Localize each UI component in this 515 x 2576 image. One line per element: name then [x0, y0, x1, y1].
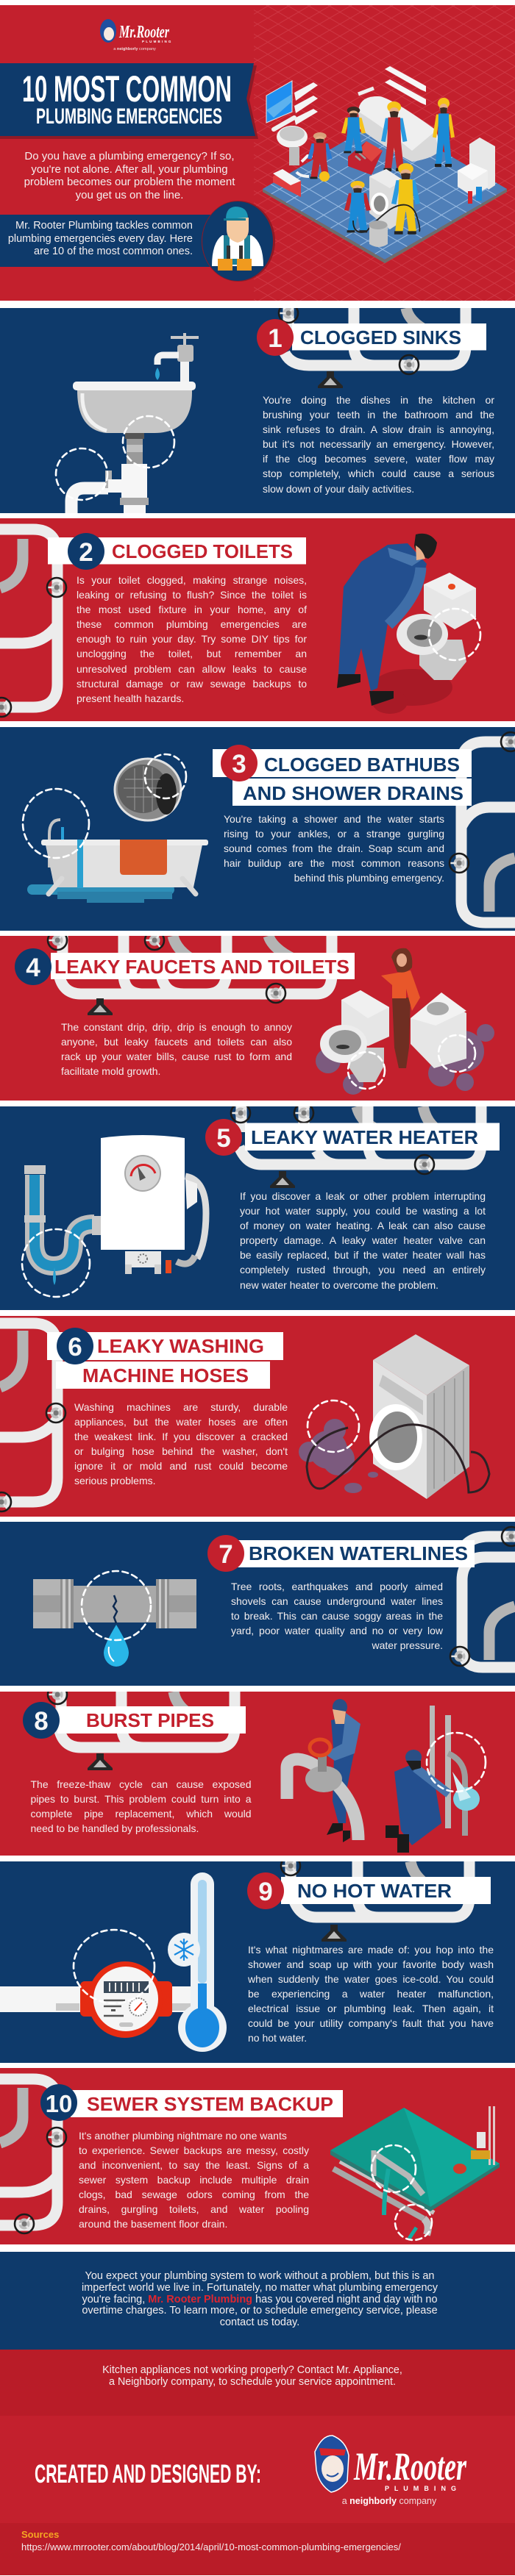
heading: leaky water heater: LEAKY WATER HEATER: [251, 1128, 478, 1148]
body text: You're taking a shower and the water starts: [224, 813, 444, 825]
body text: could be your utility company's fault that you have: [248, 2017, 494, 2029]
note text: [102, 2364, 402, 2388]
body text: if the clog becomes severe, water flow may: [263, 453, 494, 465]
callout text: [8, 220, 193, 257]
body text: but it's not necessarily an emergency. However,: [263, 438, 494, 450]
pipes: [0, 1323, 65, 1511]
body text: drains, gurgling toilets, and water pooling: [79, 2203, 309, 2215]
pipes: [231, 1103, 481, 1188]
body text: It's another plumbing nightmare no one wants: [79, 2130, 287, 2142]
illustration: sewer pipe under slab: [330, 2106, 500, 2240]
body text: Tree roots, earthquakes and poorly aimed: [231, 1581, 443, 1592]
section 1 artwork: [54, 308, 486, 513]
section 3 artwork: [22, 731, 515, 928]
body text: brushing your teeth in the bathroom and the: [263, 409, 494, 421]
logo: Mr. Rooter: PLUMBING: [142, 40, 173, 43]
body text: around the basement floor drain.: [79, 2218, 227, 2230]
body text: [248, 1944, 494, 2044]
closing text: contact us today.: [220, 2316, 299, 2328]
body text: appliances, but the water hoses are often: [74, 1416, 288, 1428]
body text: serious problems.: [74, 1475, 156, 1486]
title ribbon: 10 MOST COMMON: [22, 68, 232, 110]
closing text: You expect your plumbing system to work without a problem, but this is an: [85, 2270, 434, 2282]
illustration: workers repairing burst pipes: [287, 1699, 486, 1853]
illustration: bathroom repair scene: [263, 66, 507, 263]
body text: The freeze-thaw cycle can cause exposed: [31, 1778, 252, 1790]
body text: the most used fixture in your home, any of: [77, 604, 307, 615]
body text: be experiencing a water heater malfunction,: [248, 1988, 494, 2000]
heading: leaky faucets and toilets: [15, 948, 355, 985]
heading: no hot water: 9: [258, 1878, 273, 1906]
heading: sewer system backup: 10: [46, 2090, 72, 2117]
heading: burst pipes: BURST PIPES: [86, 1711, 214, 1731]
body text: If you discover a leak or other problem interrupting: [240, 1190, 486, 1202]
panel: appliance note: [0, 2350, 515, 2416]
heading: leaky faucets and toilets: 4: [26, 954, 40, 982]
body text: It's what nightmares are made of: you hop into the: [248, 1944, 494, 1956]
heading: leaky water heater: [205, 1119, 500, 1156]
body text: [224, 813, 444, 884]
body text: facilitate mold growth.: [61, 1065, 160, 1077]
body text: [263, 394, 494, 495]
note text: a Neighborly company, to schedule your service appointment.: [109, 2376, 396, 2388]
body text: [74, 1401, 288, 1486]
body text: sound comes from the drain. Soap scum and: [224, 842, 444, 854]
section 9 artwork: [0, 1861, 491, 2052]
title ribbon: [0, 63, 258, 139]
note text: Kitchen appliances not working properly? Contact Mr. Appliance,: [102, 2364, 402, 2376]
heading: burst pipes: [23, 1702, 246, 1739]
body text: Is your toilet clogged, making strange noises,: [77, 574, 307, 586]
heading: broken waterlines: 7: [219, 1540, 233, 1569]
callout text: are 10 of the most common ones.: [34, 246, 193, 257]
closing text: [82, 2270, 438, 2328]
body text: rising to your ankles, or a strange gurgling: [224, 828, 444, 840]
logo: Mr. Rooter large: [315, 2436, 467, 2506]
heading: leaky washing machine hoses: LEAKY WASHING: [97, 1337, 264, 1357]
body text: and inconvenient, to say the least. Signs of a: [79, 2159, 309, 2171]
heading: clogged toilets: 2: [79, 538, 93, 567]
source link: https://www.mrrooter.com/about/blog/2014/april/10-most-common-plumbing-emergencies/: [21, 2541, 401, 2552]
illustration: water heater and leaking trap: [22, 1135, 206, 1297]
body text: when suddenly the water goes ice-cold. You could: [248, 1973, 494, 1985]
body text: be easily replaced, but if the water heater wall has: [240, 1249, 486, 1261]
heading: leaky washing machine hoses: 6: [68, 1333, 82, 1362]
body text: or bulging hose behind the washer, don't: [74, 1445, 288, 1457]
body text: slow down of your daily activities.: [263, 483, 414, 495]
body text: property damage. A leaky water heater valve can: [240, 1234, 486, 1246]
body text: structural damage or raw sewage backups to: [77, 678, 307, 690]
logo: Mr. Rooter: [100, 19, 173, 51]
logo: Mr. Rooter: a neighborly company: [113, 47, 156, 51]
body text: complete pipe replacement, which would: [31, 1808, 252, 1820]
heading: no hot water: [247, 1872, 491, 1909]
body text: present health hazards.: [77, 693, 184, 704]
heading: no hot water: NO HOT WATER: [297, 1881, 452, 1902]
credits artwork: [35, 2435, 467, 2506]
body text: stop completely, which could cause a serious: [263, 468, 494, 479]
heading: sewer system backup: [40, 2084, 343, 2121]
illustration: woman with leaking fixtures: [316, 948, 494, 1095]
body text: sewer system backup include multiple drain: [79, 2174, 309, 2186]
panel: 6 leaky washing machine hoses: [0, 1316, 515, 1517]
pipes: [0, 2079, 66, 2233]
heading: broken waterlines: [207, 1535, 475, 1572]
title ribbon: PLUMBING EMERGENCIES: [36, 104, 222, 129]
heading: clogged toilets: [48, 533, 306, 570]
illustration: leaking sink: [56, 333, 199, 513]
body text: water pressure.: [372, 1639, 443, 1651]
icon: plumber with wrenches: [212, 207, 263, 271]
heading: clogged toilets: CLOGGED TOILETS: [112, 542, 293, 562]
intro artwork: [0, 5, 515, 301]
heading: clogged sinks: 1: [268, 324, 283, 353]
body text: need to be handled by professionals.: [31, 1822, 199, 1834]
body text: ignore it or mold and rust could become: [74, 1460, 288, 1472]
intro text: problem becomes our problem the moment: [24, 176, 235, 188]
intro text: Do you have a plumbing emergency? If so,: [24, 150, 235, 162]
heading: leaky faucets and toilets: LEAKY FAUCETS AND TOILETS: [54, 957, 349, 978]
body text: [61, 1021, 292, 1077]
pipes: [450, 732, 515, 923]
body text: yard, poor water quality and no or very low: [231, 1625, 443, 1636]
pipes: [450, 1527, 515, 1667]
panel: credits: [0, 2416, 515, 2523]
body text: to break. This can cause soggy areas in the: [231, 1610, 443, 1622]
body text: [31, 1778, 252, 1834]
logo: Mr. Rooter large: P L U M B I N G: [385, 2485, 456, 2492]
body text: You're doing the dishes in the kitchen or: [263, 394, 494, 406]
pipes: [48, 1685, 235, 1770]
logo: Mr. Rooter large: a neighborly company: [342, 2496, 437, 2506]
body text: behind this plumbing emergency.: [294, 872, 444, 884]
section 5 artwork: [21, 1106, 500, 1298]
section 8 artwork: [23, 1692, 487, 1853]
panel: 7 broken waterlines: [0, 1522, 515, 1686]
intro text: you're not alone. After all, your plumbing: [31, 163, 228, 176]
heading: leaky washing machine hoses: [47, 1328, 283, 1389]
body text: [231, 1581, 443, 1651]
body text: anyone, but leaky faucets and toilets can also: [61, 1036, 292, 1048]
created and designed by: CREATED AND DESIGNED BY:: [35, 2460, 261, 2489]
body text: unresolved problem can allow leaks to cause: [77, 663, 307, 675]
panel: intro header: [0, 5, 515, 301]
body text: unclogging the toilet, but remember an: [77, 648, 307, 659]
body text: pipes to burst. This problem could turn into a: [31, 1793, 252, 1805]
panel: sources: [0, 2523, 515, 2575]
pipes: [281, 1856, 469, 1942]
panel: closing message: [0, 2252, 515, 2350]
pipes: [0, 529, 66, 717]
body text: to experience. Sewer backups are messy, costly: [79, 2144, 309, 2156]
section 6 artwork: [0, 1317, 490, 1513]
closing text: imperfect world we live in. Fortunately, no matter what plumbing emergency: [82, 2282, 438, 2294]
panel: 8 burst pipes: [0, 1692, 515, 1856]
section 4 artwork: [15, 936, 494, 1095]
body text: the weakest link. If you discover a cracked: [74, 1431, 288, 1442]
body text: electrical issue or plumbing leak. Then again, it: [248, 2003, 494, 2014]
body text: [77, 574, 308, 704]
sources label: Sources: [21, 2529, 59, 2540]
body text: no hot water.: [248, 2032, 307, 2044]
pipes: [279, 304, 466, 388]
body text: The constant drip, drip, drip is enough to annoy: [61, 1021, 292, 1033]
section 2 artwork: [0, 523, 481, 718]
intro text: you get us on the line.: [76, 189, 183, 201]
heading: leaky water heater: 5: [216, 1124, 231, 1153]
illustration: washing machine with leak: [299, 1334, 489, 1499]
heading: broken waterlines: BROKEN WATERLINES: [249, 1544, 468, 1564]
heading: burst pipes: 8: [34, 1707, 49, 1736]
panel: 1 clogged sinks: [0, 308, 515, 513]
body text: leaking or refusing to flush? Since the toilet is: [77, 589, 307, 601]
heading: clogged bathubs and shower drains: [213, 745, 472, 806]
heading: clogged bathubs and shower drains: CLOGGED BATHUBS: [264, 755, 460, 776]
panel: 9 no hot water: [0, 1861, 515, 2063]
section 10 artwork: [0, 2073, 500, 2241]
illustration: man at toilet: [337, 534, 480, 714]
body text: new water heater to overcome the problem.: [240, 1279, 438, 1291]
panel: 4 leaky faucets and toilets: [0, 936, 515, 1101]
section 7 artwork: [33, 1526, 515, 1673]
body text: Washing machines are sturdy, durable: [74, 1401, 288, 1413]
pipes: [48, 931, 332, 1015]
body text: completely rusted through, you need an entirely: [240, 1264, 486, 1276]
heading: clogged bathubs and shower drains: 3: [232, 750, 246, 779]
logo: Mr. Rooter: Mr.Rooter: [118, 23, 169, 42]
heading: clogged bathubs and shower drains: AND SHOWER DRAINS: [243, 784, 464, 804]
body text: [240, 1190, 486, 1291]
callout text: plumbing emergencies every day. Here: [8, 233, 193, 245]
body text: rack up your water bills, cause rust to form and: [61, 1051, 292, 1062]
illustration: water meter and thermometer: [0, 1872, 227, 2052]
body text: shower and soap up with your favorite body wash: [248, 1958, 494, 1970]
body text: shovels can cause underground water lines: [231, 1595, 443, 1607]
body text: these common plumbing emergencies are: [77, 618, 307, 630]
heading: leaky washing machine hoses: MACHINE HOSES: [82, 1366, 249, 1387]
body text: [79, 2130, 309, 2230]
callout text: Mr. Rooter Plumbing tackles common: [15, 220, 193, 232]
body text: enough to ruin your day. Try some DIY tips for: [77, 633, 307, 645]
panel: 10 sewer system backup: [0, 2068, 515, 2244]
illustration: cracked pipe: [33, 1571, 196, 1667]
panel: 2 clogged toilets: [0, 518, 515, 721]
body text: of money on water heating. A leak can also cause: [240, 1220, 486, 1231]
heading: clogged sinks: CLOGGED SINKS: [300, 328, 461, 348]
body text: sink refuses to drain. A slow drain is annoying,: [263, 423, 494, 435]
callout band: [0, 201, 275, 282]
closing text: you're facing, Mr. Rooter Plumbing has you covered night and day with no: [82, 2294, 438, 2305]
panel: 5 leaky water heater: [0, 1106, 515, 1310]
illustration: overflowing tub and drain: [23, 754, 208, 903]
heading: clogged sinks: [257, 319, 486, 356]
body text: your hot water supply, you could be wasting a lot: [240, 1205, 486, 1217]
background grid: [254, 5, 515, 301]
heading: sewer system backup: SEWER SYSTEM BACKUP: [87, 2094, 333, 2115]
intro text: [24, 150, 235, 201]
panel: 3 clogged bathubs and shower drains: [0, 727, 515, 931]
body text: hair buildup are the most common reasons: [224, 857, 444, 869]
closing text: overtime charges. To learn more, or to schedule emergency service, please: [82, 2305, 438, 2316]
body text: clogs, bad sewage odors coming from the: [79, 2189, 309, 2200]
